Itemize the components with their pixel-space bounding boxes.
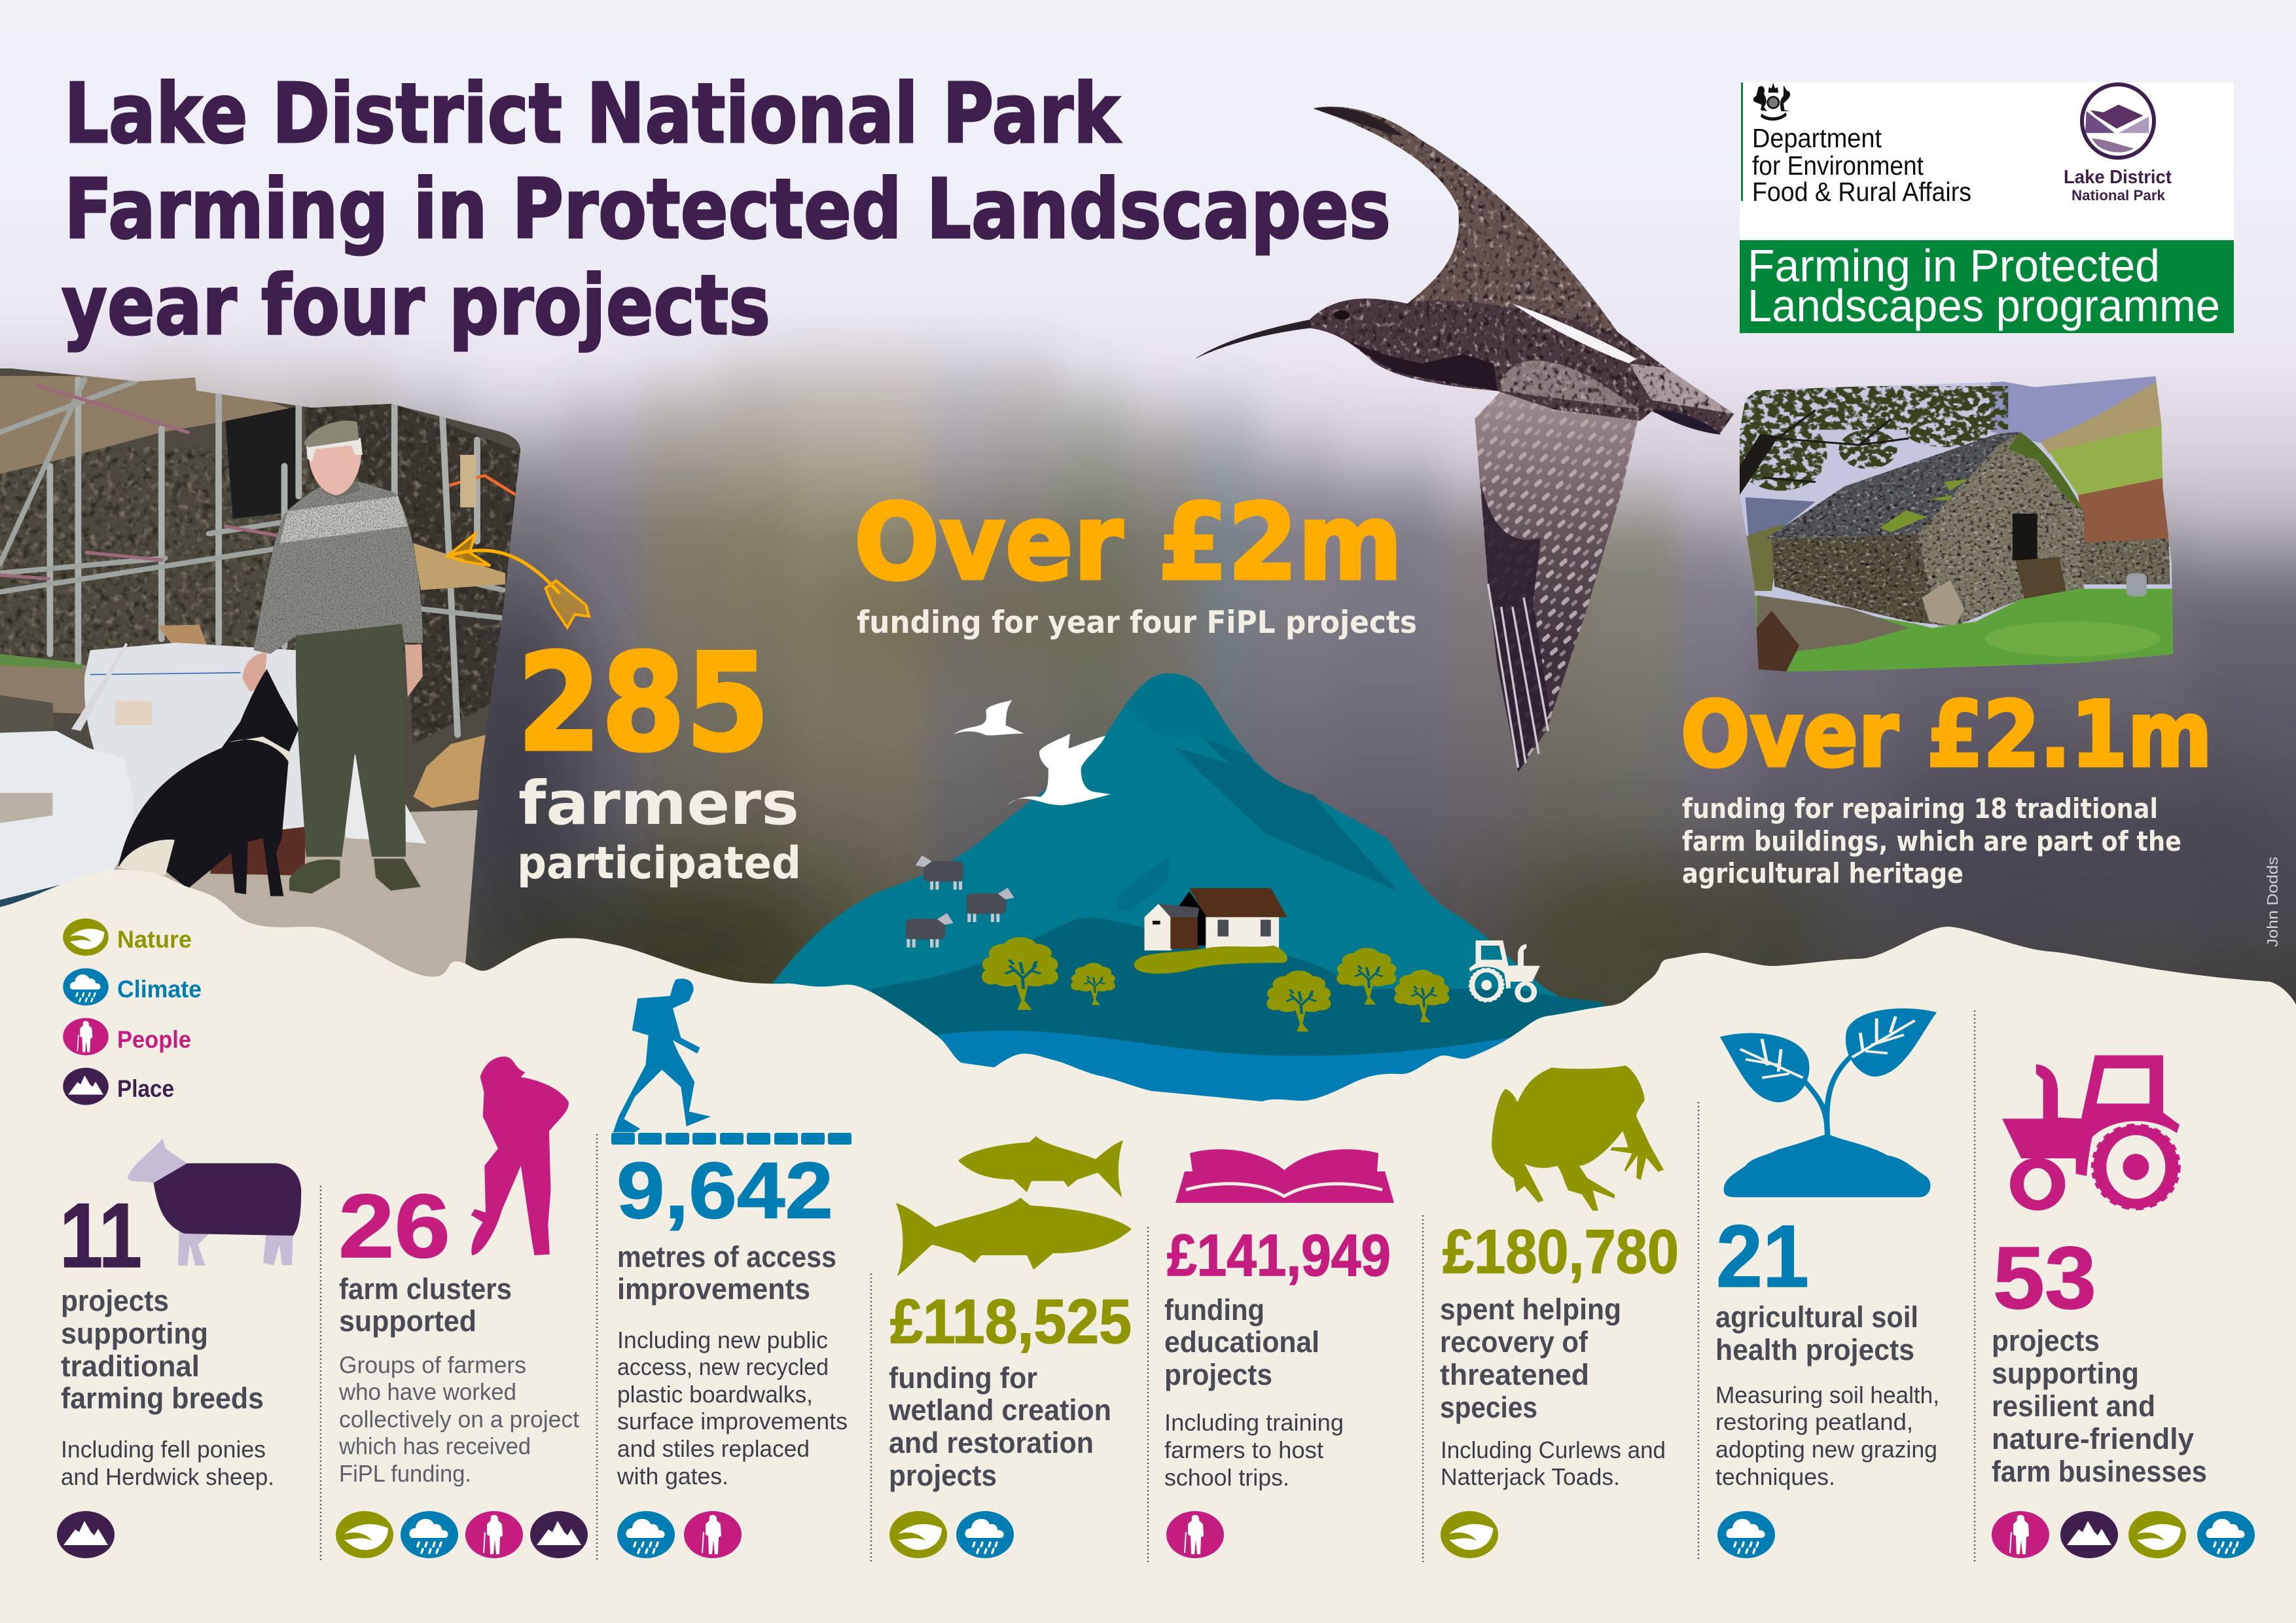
theme icons [889,1511,1014,1558]
birds [954,700,1111,805]
farmhouse [1134,888,1287,974]
panel: soil health: 21 [1716,1207,1809,1306]
panel: threatened species: threatened [1440,1358,1589,1391]
panel: soil health: health projects [1715,1333,1914,1366]
panel: resilient farm businesses: 53 [1993,1228,2096,1327]
foreground hill [872,917,1604,1143]
icon: Lake District National Park logo: Lake District [2064,167,2172,188]
stat: 285 farmers: participated [517,838,801,889]
panel: traditional breeds: farming breeds [61,1382,264,1415]
panel: wetland creation: £118,525 [890,1287,1132,1357]
panel: threatened species [1440,1065,1679,1558]
panel: access improvements: plastic boardwalks, [617,1381,813,1408]
panel: farm clusters: who have worked [338,1378,516,1405]
icon: Lake District National Park logo [2064,84,2172,204]
panel: farm clusters: 26 [338,1176,450,1277]
cream foreground panel [0,870,2296,1623]
panel: soil health: Measuring soil health, [1715,1382,1939,1408]
icon: white tractor on hillside [1469,940,1540,1001]
icon: fish [896,1136,1132,1276]
panel: soil health: adopting new grazing [1715,1436,1937,1463]
panel: wetland creation: projects [889,1459,997,1492]
legend item: place: Place [117,1075,174,1102]
text: Defra: for Environment [1752,151,1924,181]
panel: educational projects: school trips. [1164,1464,1289,1491]
icon: orange arrow [447,534,589,628]
legend item: nature [63,919,192,955]
sheep flock [906,855,1014,948]
panel: educational projects: farmers to host [1164,1436,1323,1463]
panel: traditional breeds: traditional [61,1349,200,1383]
mountain shadows [1117,673,1399,911]
photo credit: John Dodds [2264,857,2281,947]
title: Lake District National Park [64,65,1122,162]
panel: resilient farm businesses: resilient and [1992,1389,2155,1423]
panel: soil health: restoring peatland, [1715,1408,1913,1435]
legend item: people [63,1018,191,1055]
white logo background [1740,82,2234,240]
trees [982,937,1449,1031]
panel: access improvements: surface improvements [617,1408,848,1435]
photo: farmer with dog at scaffolded barn [0,368,520,976]
mountain [772,673,1604,1143]
icon: natterjack toad [1492,1065,1664,1211]
panel: resilient farm businesses: projects [1992,1324,2100,1357]
photo: traditional stone farm building [1740,376,2173,671]
title [62,65,1391,353]
panel: resilient farm businesses: supporting [1992,1357,2139,1390]
legend item: place [63,1068,174,1105]
theme icons [1992,1511,2255,1558]
panel: access improvements: with gates. [617,1463,728,1489]
panel: threatened species: species [1440,1391,1537,1424]
panel: wetland creation [888,1136,1132,1558]
text: Defra: Department [1752,123,1882,153]
panel: threatened species: £180,780 [1443,1217,1679,1287]
stat: 285 farmers: 285 [517,626,770,781]
theme icons [617,1511,742,1558]
stat: over 2.1m repairs: Over £2.1m [1681,682,2212,787]
stat: over 2.1m repairs: farm buildings, which are part of the [1682,825,2181,857]
panel: traditional breeds: projects [61,1284,169,1317]
background: blurred fell landscape [0,0,2296,1007]
text: Defra: Food & Rural Affairs [1752,177,1971,207]
panel: farm clusters: which has received [338,1433,531,1459]
panel: traditional breeds: 11 [60,1184,142,1287]
panel: educational projects: £141,949 [1167,1223,1391,1289]
photo: curlew in flight [1195,107,1734,772]
stat: over 2m funding: funding for year four FiPL projects [857,605,1417,641]
programme banner: Farming in Protected [1748,240,2160,291]
stat: 285 farmers [517,626,801,889]
icon: walker on boardwalk [611,978,852,1145]
legend item: people: People [117,1026,191,1053]
panel: soil health: techniques. [1715,1463,1835,1490]
panel: traditional breeds: Including fell ponies [61,1436,266,1463]
icon: farmer silhouette [471,1056,569,1255]
icon: open book [1175,1149,1394,1203]
panel: farm clusters: FiPL funding. [339,1460,471,1487]
panel: access improvements [611,978,852,1558]
text: Defra [1752,123,1971,207]
stat: over 2m funding: Over £2m [854,481,1403,603]
icon: sheep [128,1139,301,1266]
stat: over 2.1m repairs [1681,682,2212,889]
panel: farm clusters: Groups of farmers [339,1351,526,1378]
panel: traditional breeds [57,1139,301,1558]
icon: climate [1717,1511,1775,1558]
panel: soil health: agricultural soil [1715,1300,1918,1334]
panel: farm clusters: supported [339,1304,476,1338]
icon: Lake District National Park logo: National Park [2072,187,2166,204]
panel: soil health [1715,1008,1939,1558]
panel: educational projects: Including training [1164,1409,1344,1436]
icon: place [57,1511,115,1558]
panel: wetland creation: and restoration [889,1426,1094,1459]
panel: wetland creation: funding for [889,1361,1037,1395]
logos panel [1740,82,2234,333]
icon: nature [1441,1511,1498,1558]
theme icons [336,1511,588,1558]
panel: access improvements: metres of access [617,1240,836,1274]
panel: traditional breeds: supporting [61,1317,208,1350]
panel: farm clusters [336,1056,588,1558]
stat: over 2.1m repairs: agricultural heritage [1682,857,1964,889]
panel: wetland creation: wetland creation [888,1393,1111,1427]
lake [932,1031,1523,1143]
panel: access improvements: access, new recycled [617,1353,829,1380]
illustration: mountain scene [772,673,1604,1143]
panel: access improvements: Including new public [617,1327,828,1353]
title: year four projects [62,257,770,353]
stat: 285 farmers: farmers [518,768,799,838]
panel: threatened species: Natterjack Toads. [1441,1463,1620,1490]
legend item: climate [63,969,202,1005]
panel: educational projects: funding [1164,1293,1265,1327]
panel: educational projects: projects [1164,1358,1272,1391]
programme banner: Landscapes programme [1748,280,2220,331]
panel: resilient farm businesses [1992,1055,2255,1558]
legend [63,919,202,1105]
icon: royal crest [1753,83,1790,120]
panel: farm clusters: farm clusters [339,1272,512,1306]
panel: threatened species: Including Curlews and [1441,1436,1666,1463]
icon: tractor [2002,1055,2179,1208]
title: Farming in Protected Landscapes [64,161,1391,257]
panel: resilient farm businesses: nature-friendly [1992,1422,2194,1455]
icon: people [1166,1511,1224,1558]
panel: educational projects [1164,1149,1394,1558]
panel: access improvements: improvements [617,1272,810,1306]
panel: educational projects: educational [1164,1325,1319,1359]
panel: traditional breeds: and Herdwick sheep. [61,1463,274,1490]
panel: resilient farm businesses: farm businesses [1992,1455,2207,1488]
stat: over 2.1m repairs: funding for repairing 18 traditional [1682,793,2158,825]
panel: access improvements: and stiles replaced [617,1435,810,1462]
panel: threatened species: recovery of [1440,1325,1588,1359]
panel: threatened species: spent helping [1440,1293,1621,1326]
legend item: nature: Nature [117,926,192,953]
icon: seedling in soil [1720,1008,1937,1197]
panel: access improvements: 9,642 [617,1146,833,1235]
panel: farm clusters: collectively on a project [339,1406,579,1433]
legend item: climate: Climate [117,976,202,1003]
programme banner [1740,240,2234,333]
